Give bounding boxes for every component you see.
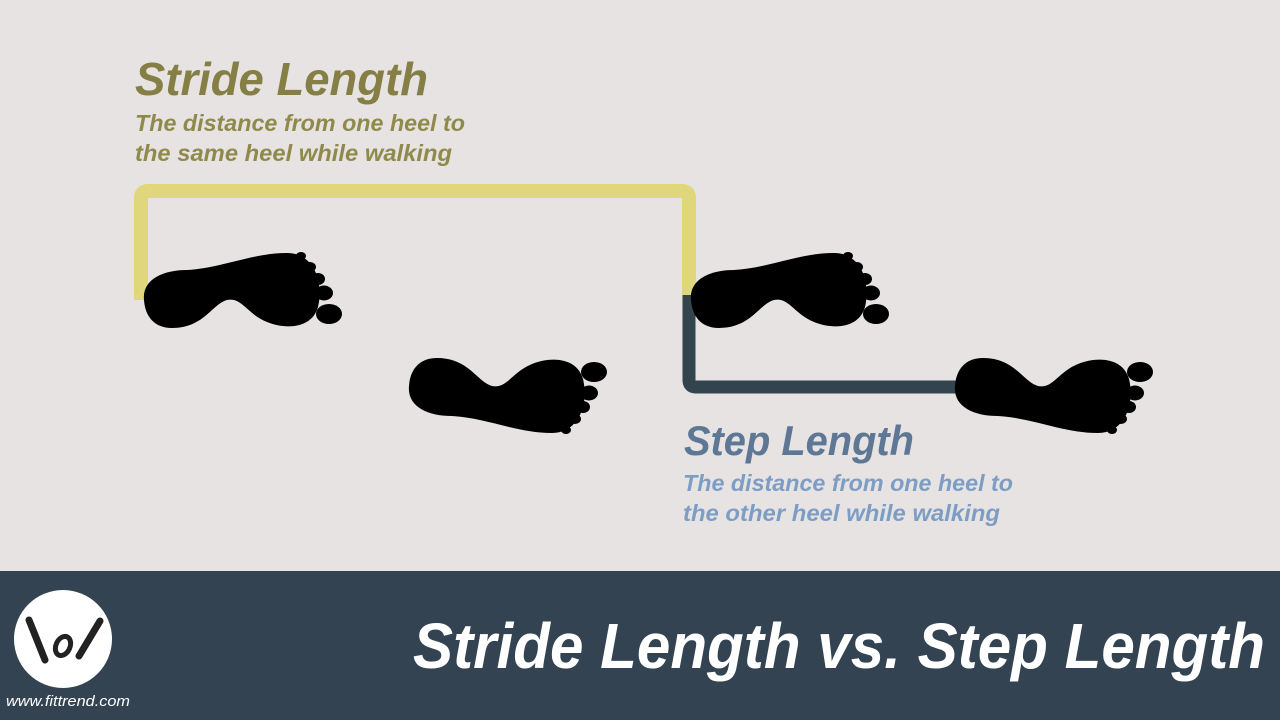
stride description [135,110,465,166]
step description: The distance from one heel to [683,470,1013,496]
stride description: The distance from one heel to [135,110,465,136]
stride heading: Stride Length [135,53,428,105]
website url: www.fittrend.com [6,693,130,710]
step heading: Step Length [684,417,914,464]
footprint 1 [144,252,342,328]
step description [683,470,1013,526]
logo [14,590,112,688]
step description: the other heel while walking [683,500,1000,526]
stride heading [135,53,465,166]
footer band [0,571,1280,720]
stride bracket line [141,191,689,300]
footprint 3 [691,252,889,328]
stride description: the same heel while walking [135,140,452,166]
footprint 4 [955,358,1153,434]
footprint 2 [409,358,607,434]
step bracket line [689,295,962,387]
step heading [683,417,1013,526]
